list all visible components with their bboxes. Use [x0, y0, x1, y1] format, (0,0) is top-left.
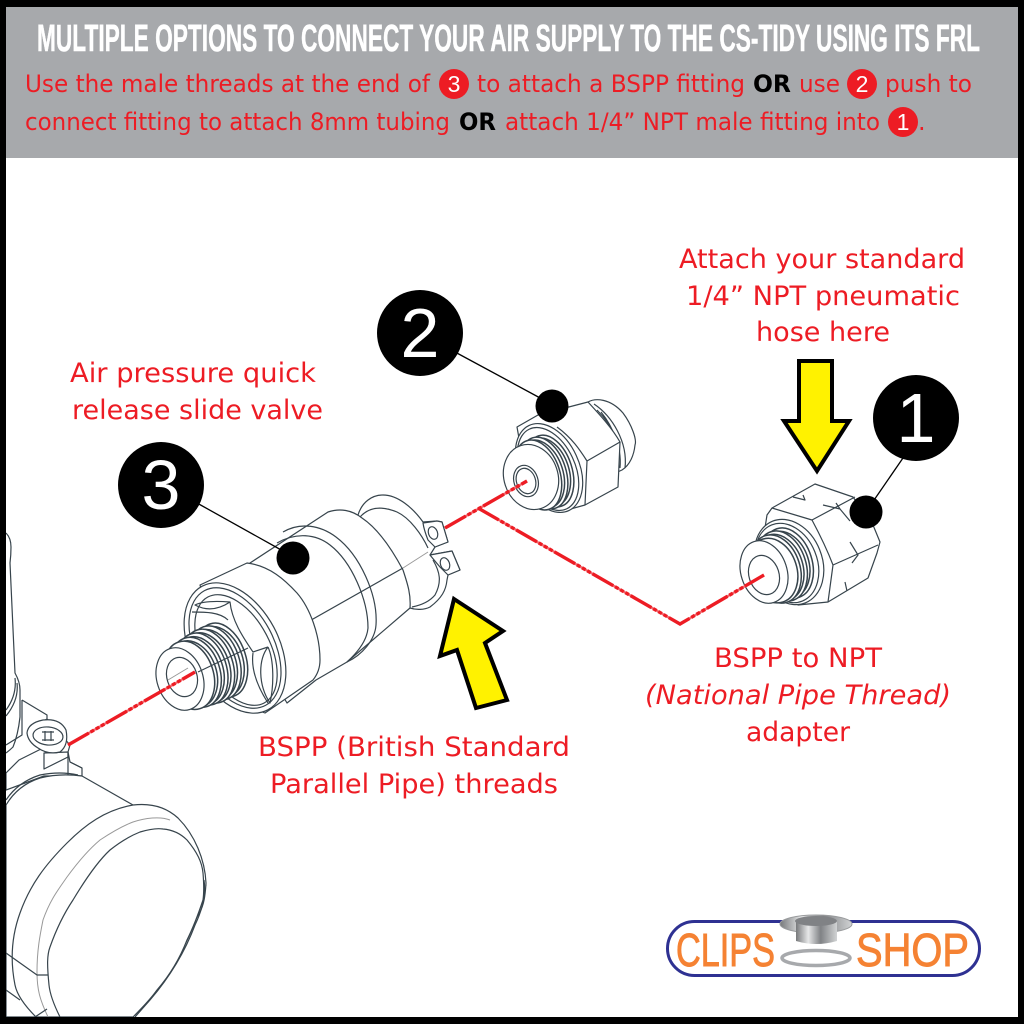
instruction text: 1	[897, 109, 909, 135]
label: BSPP threads	[258, 732, 570, 800]
yellow arrow: threads	[440, 599, 507, 708]
header panel	[6, 7, 1018, 158]
seam line	[253, 568, 403, 653]
callout 2: 2	[401, 294, 439, 372]
callout 1	[850, 375, 959, 528]
instruction text: use	[799, 70, 840, 98]
label: BSPP to NPT adapter: BSPP to NPT	[714, 643, 883, 674]
label: BSPP to NPT adapter: (National Pipe Thread)	[645, 680, 951, 711]
FRL unit and gauge	[6, 533, 206, 1017]
part 1: BSPP to NPT adapter	[732, 484, 880, 615]
label: BSPP to NPT adapter: adapter	[746, 717, 851, 748]
label: BSPP threads: Parallel Pipe) threads	[270, 769, 558, 800]
label: slide valve: Air pressure quick	[70, 358, 316, 389]
instruction text: 2	[856, 71, 868, 97]
callout 1: 1	[897, 379, 935, 457]
bolt head	[27, 720, 67, 753]
red connection lines	[68, 481, 764, 745]
thread	[148, 616, 257, 717]
instruction text: OR	[459, 108, 496, 136]
instruction text: Use the male threads at the end of	[25, 70, 431, 98]
instruction text: to attach a BSPP fitting	[477, 70, 745, 98]
instruction text: OR	[753, 70, 791, 98]
label: slide valve: release slide valve	[72, 395, 323, 426]
label: BSPP to NPT adapter	[645, 643, 951, 748]
label: standard hose: 1/4” NPT pneumatic	[686, 281, 960, 312]
part 3: slide valve	[148, 495, 460, 730]
instruction text: push to	[885, 70, 972, 98]
instruction text: attach 1/4” NPT male fitting into	[505, 108, 880, 136]
label: standard hose: Attach your standard	[679, 244, 965, 275]
part 2: push to connect fitting	[495, 400, 635, 523]
instruction text: connect fitting to attach 8mm tubing	[25, 108, 450, 136]
label: standard hose: hose here	[756, 317, 890, 348]
icon: eyelet	[780, 915, 852, 966]
circlip flange	[358, 495, 460, 609]
label: slide valve	[70, 358, 323, 426]
yellow arrow: hose	[784, 361, 849, 471]
instruction text	[25, 69, 972, 137]
logo: Clips Shop: CLIPS	[676, 924, 775, 976]
hex flange	[163, 566, 307, 730]
callout 2	[377, 290, 568, 422]
callout 3: 3	[142, 446, 180, 524]
instruction text: 3	[448, 71, 460, 97]
callout 3	[118, 442, 310, 574]
label: standard hose	[679, 244, 965, 348]
logo: Clips Shop	[668, 915, 980, 976]
label: BSPP threads: BSPP (British Standard	[258, 732, 570, 763]
instruction text: .	[918, 108, 926, 136]
front collar	[200, 563, 320, 713]
main cylinder	[250, 510, 410, 703]
logo: Clips Shop: SHOP	[856, 924, 969, 976]
